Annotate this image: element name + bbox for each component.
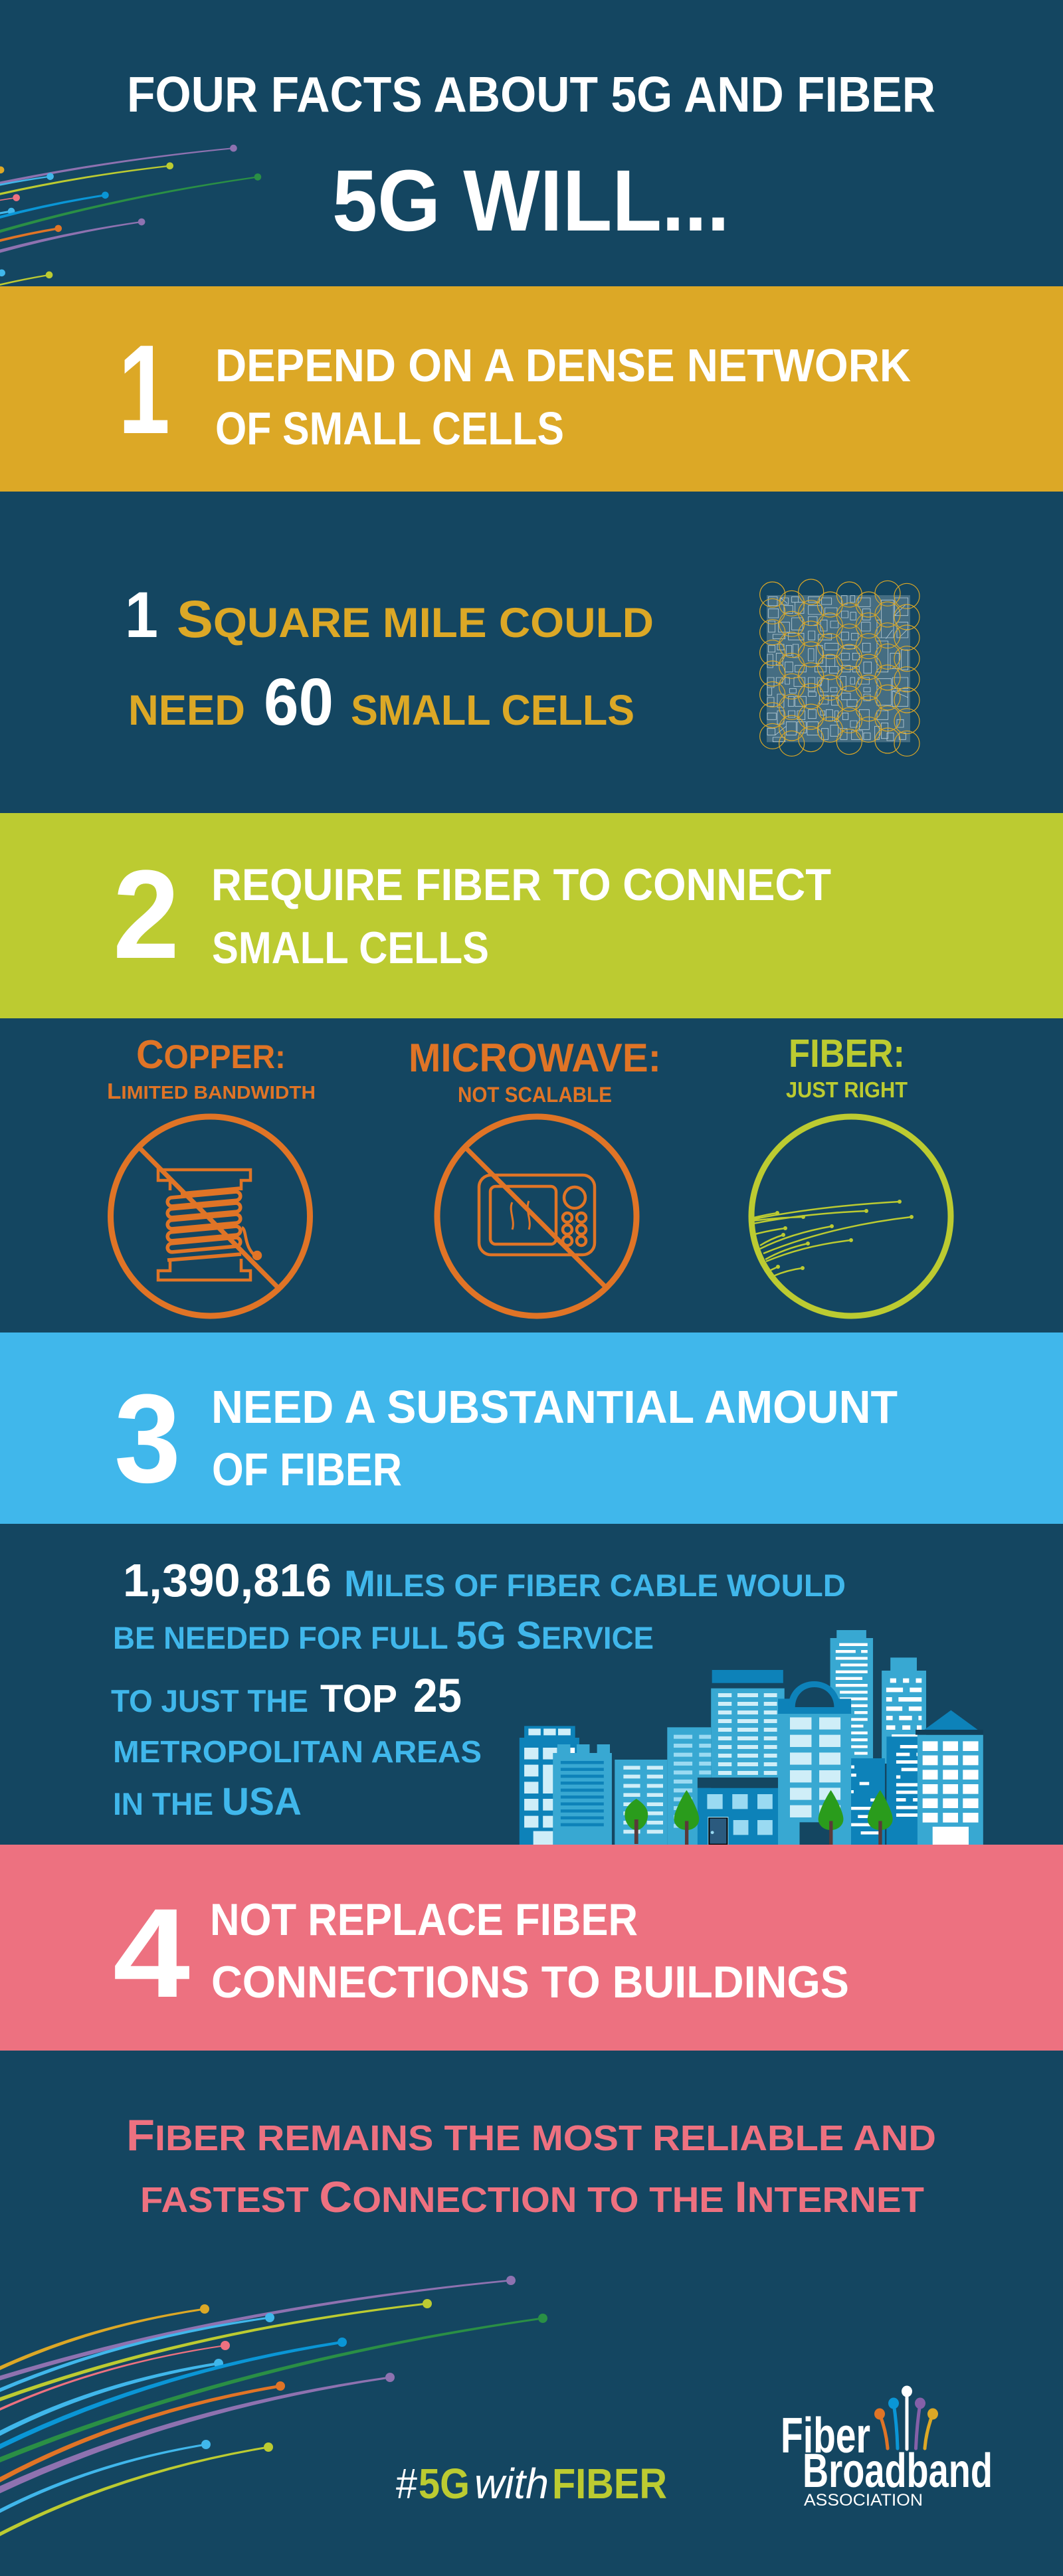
number 4: 4 — [113, 1883, 190, 2024]
fact 1 heading — [215, 339, 911, 454]
number 3: 3 — [114, 1368, 181, 1509]
stat text: TO JUST THE — [111, 1683, 308, 1718]
logo strands — [874, 2386, 938, 2449]
closing statement — [126, 2110, 936, 2221]
panel: small cell stat — [125, 579, 919, 756]
hashtag: # — [396, 2460, 417, 2508]
stat text: 60 — [264, 665, 334, 739]
stat text: MILES OF FIBER CABLE WOULD — [344, 1562, 846, 1604]
fact 1 heading: OF SMALL CELLS — [215, 403, 564, 454]
stat text: IN THE USA — [113, 1780, 302, 1823]
hashtag: with — [474, 2460, 549, 2508]
icon: fiber strands in circle — [749, 1117, 951, 1316]
closing statement: FASTEST CONNECTION TO THE INTERNET — [140, 2172, 924, 2221]
microwave label — [409, 1036, 661, 1107]
number 1: 1 — [118, 319, 170, 460]
panel: fact 2 — [0, 813, 1063, 1018]
number 2: 2 — [113, 844, 179, 985]
fiber label: JUST RIGHT — [786, 1077, 908, 1102]
icon: microwave crossed out — [437, 1117, 636, 1316]
panel: copper — [107, 1032, 316, 1316]
stat text: SQUARE MILE COULD — [177, 589, 654, 648]
stat text: SMALL CELLS — [351, 686, 634, 734]
logo wordmark: Fiber — [781, 2407, 870, 2463]
panel: microwave — [409, 1036, 661, 1316]
stat text: 1,390,816 — [123, 1554, 332, 1606]
closing statement: FIBER REMAINS THE MOST RELIABLE AND — [126, 2110, 936, 2160]
logo wordmark: ASSOCIATION — [804, 2491, 923, 2510]
fiber label — [786, 1032, 908, 1102]
fact 4 heading — [210, 1894, 849, 2007]
fact 3 heading — [211, 1381, 898, 1495]
panel: fact 1 — [0, 286, 1063, 492]
fact 2 heading: REQUIRE FIBER TO CONNECT — [211, 860, 831, 910]
stat text: METROPOLITAN AREAS — [113, 1734, 482, 1769]
band: fact 3 — [0, 1333, 1063, 1524]
fact 2 heading — [211, 860, 831, 973]
band: fact 1 — [0, 286, 1063, 492]
fiber label: FIBER: — [789, 1032, 905, 1075]
title: FOUR FACTS ABOUT 5G AND FIBER — [127, 66, 935, 122]
panel: fact 4 — [0, 1845, 1063, 2051]
hashtag: 5G — [419, 2460, 470, 2508]
hashtag — [396, 2460, 667, 2508]
stat text: 1 — [125, 579, 158, 651]
stat text — [111, 1554, 846, 1823]
logo wordmark: Broadband — [803, 2444, 993, 2498]
panel: fiber miles stat — [111, 1554, 983, 1845]
icon: city skyline — [520, 1630, 983, 1845]
fact 1 heading: DEPEND ON A DENSE NETWORK — [215, 339, 911, 391]
microwave label: MICROWAVE: — [409, 1036, 661, 1080]
panel: fact 3 — [0, 1333, 1063, 1524]
icon: copper spool crossed out — [110, 1117, 310, 1316]
band: fact 4 — [0, 1845, 1063, 2051]
icon: fiber strands top left — [0, 145, 261, 343]
panel: fiber — [749, 1032, 951, 1316]
hashtag: FIBER — [552, 2460, 667, 2508]
microwave label: NOT SCALABLE — [458, 1083, 612, 1107]
icon: city map with small cell circles — [760, 579, 919, 756]
fact 3 heading: OF FIBER — [212, 1443, 402, 1495]
heading: 5G will: 5G WILL... — [332, 151, 729, 249]
logo: Fiber Broadband Association — [781, 2386, 993, 2510]
logo wordmark — [781, 2407, 993, 2510]
fact 4 heading: NOT REPLACE FIBER — [210, 1894, 638, 1945]
stat text: NEED — [128, 686, 245, 734]
fact 2 heading: SMALL CELLS — [212, 923, 489, 973]
stat text: BE NEEDED FOR FULL 5G SERVICE — [113, 1614, 654, 1657]
icon: fiber strands bottom left — [0, 2276, 547, 2536]
band: fact 2 — [0, 813, 1063, 1018]
copper label: LIMITED BANDWIDTH — [107, 1079, 316, 1103]
stat text: 25 — [413, 1670, 462, 1722]
copper label: COPPER: — [136, 1032, 286, 1077]
fact 4 heading: CONNECTIONS TO BUILDINGS — [211, 1957, 849, 2007]
stat text: TOP — [320, 1677, 397, 1720]
fact 3 heading: NEED A SUBSTANTIAL AMOUNT — [211, 1381, 898, 1433]
stat text — [125, 579, 654, 739]
copper label — [107, 1032, 316, 1103]
